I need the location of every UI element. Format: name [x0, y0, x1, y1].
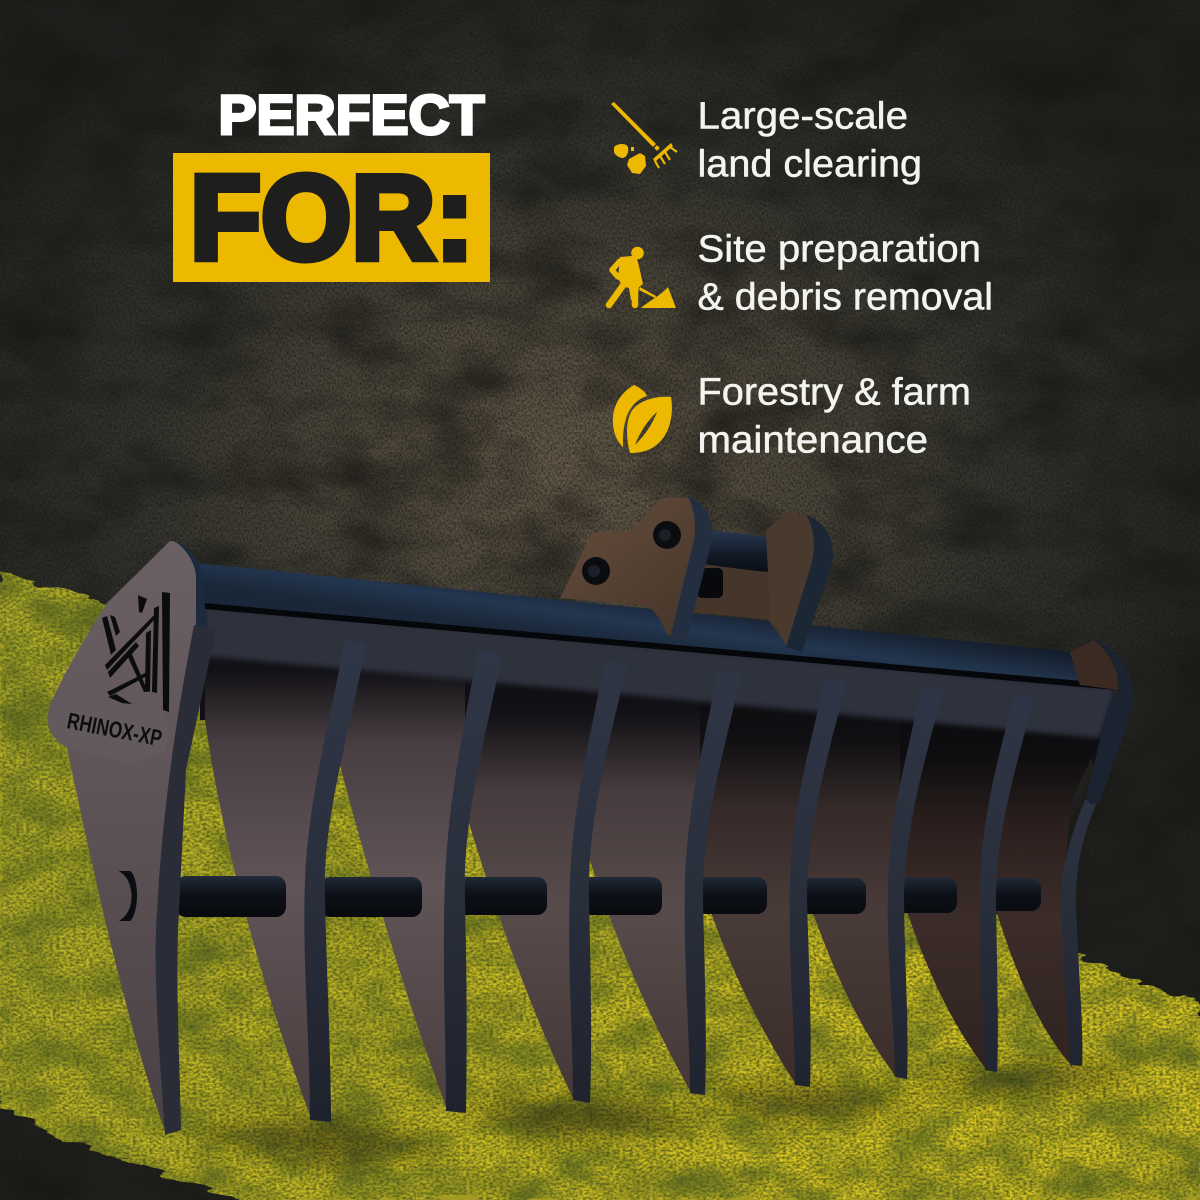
icon: worker with shovel [609, 247, 676, 308]
headline: perfect for [173, 83, 490, 285]
yellow label [173, 153, 490, 282]
yellow paint brush stroke [0, 570, 1200, 1200]
top beam [197, 563, 1118, 690]
text: large-scale land clearing: Large-scale [698, 96, 908, 138]
back plate dark fill [200, 610, 1115, 790]
hitch bracket [560, 496, 833, 652]
rake shadow on ground [185, 1064, 1140, 1165]
logo text: RHINOX-XP [65, 707, 164, 751]
plate slot [122, 872, 136, 920]
tine blades [205, 650, 1100, 1120]
right end plate [1070, 640, 1134, 804]
text: large-scale land clearing: land clearing [698, 144, 922, 186]
left side plate [48, 540, 216, 1135]
rake attachment [48, 496, 1134, 1135]
tine front edges [304, 640, 1098, 1122]
text: site preparation and debris removal: Site preparation [698, 228, 981, 270]
lit band under the beam [204, 606, 1116, 738]
text: site preparation and debris removal: & debris removal [698, 276, 993, 318]
text: forestry and farm maintenance: Forestry & farm [698, 372, 971, 414]
for: FOR: [190, 151, 474, 285]
logo tag [48, 695, 168, 763]
perfect: PERFECT [218, 83, 484, 146]
cross bar segments [176, 876, 1041, 917]
icon: leaves [613, 385, 672, 453]
text: forestry and farm maintenance: maintenance [698, 420, 928, 462]
logo emblem [102, 592, 170, 712]
icon: rake and rocks [611, 102, 677, 174]
